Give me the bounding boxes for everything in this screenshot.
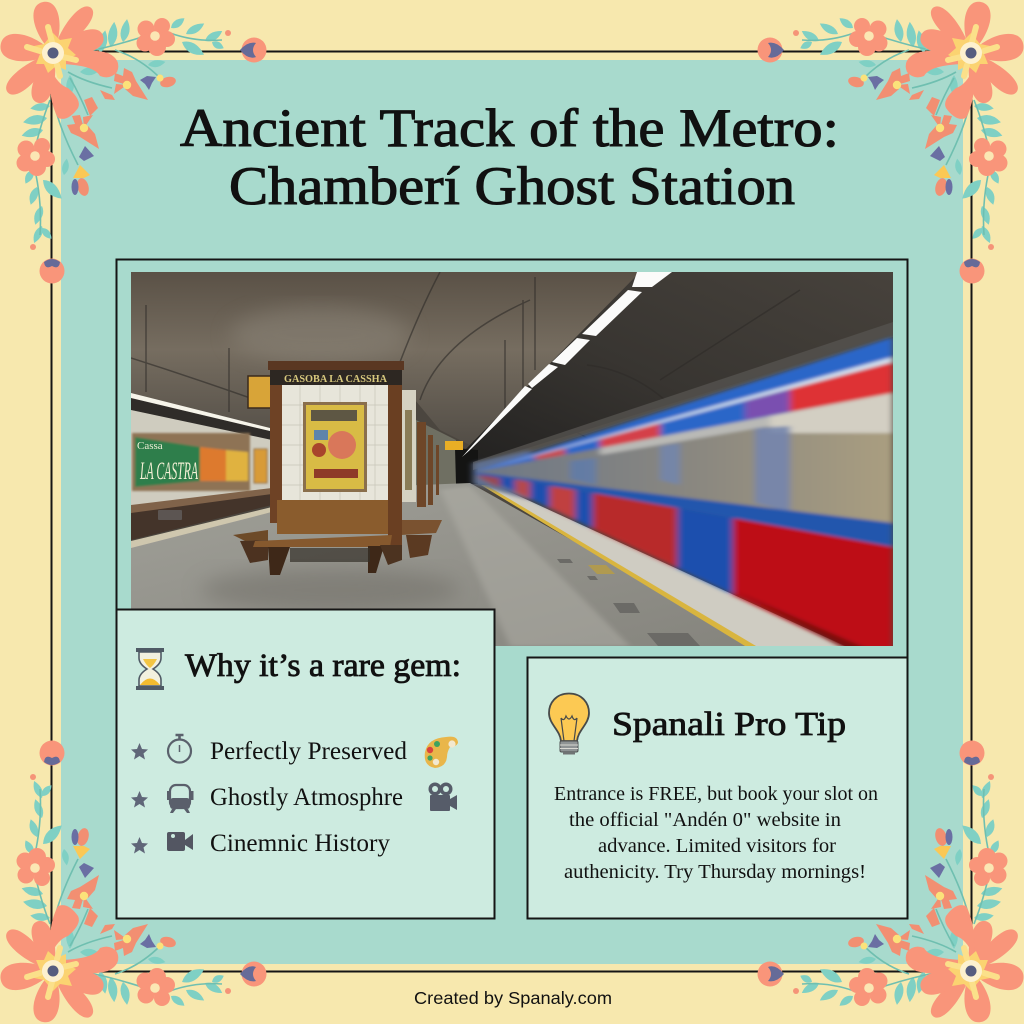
photo: metro platform with passing train: LA CASTRA [140,458,198,485]
mint main panel [61,60,963,964]
floral corner: top right [758,0,1024,283]
track plaque [158,510,182,520]
distant columns [417,422,439,507]
right vaulted ceiling [460,272,893,465]
icon: star bullet 2 [131,791,148,808]
yellow floor patch [588,565,615,574]
tip body text [554,783,878,883]
icon: star bullet 3 [131,837,148,854]
tip body text: authenicity. Try Thursday mornings! [564,861,866,883]
left lamp bar [131,398,270,441]
ceiling light strip [462,272,672,457]
dark tunnel mouth [455,448,478,484]
kiosk sign text: GASOBA LA CASSHA [284,374,388,385]
left wall adverts [132,433,267,491]
lit ceiling patch [230,307,410,363]
icon: hourglass [136,648,164,690]
train body [473,337,893,670]
tip body text: the official "Andén 0" website in [569,809,841,831]
far platform wall [416,420,456,486]
train roof edge [473,322,893,470]
list item 3: Cinemnic History [210,830,390,857]
lower brown wall [131,494,270,540]
floral corner: bottom left [0,740,266,1024]
photo: metro platform with passing train [131,272,893,670]
platform floor [131,483,760,646]
distant yellow sign [445,441,463,450]
title [180,98,839,216]
icon: star bullet 1 [131,743,148,760]
footer credit: Created by Spanaly.com [414,988,612,1008]
icon: train [167,785,194,813]
left vaulted ceiling [131,272,640,445]
title: Ancient Track of the Metro: [180,98,839,158]
icon: light bulb [549,694,589,754]
hanging yellow sign [248,376,272,408]
list item 1: Perfectly Preserved [210,738,407,765]
left bench [233,530,268,563]
left advert lettering: Cassa [137,440,163,452]
kiosk poster [303,402,367,492]
icon: video camera [167,832,193,851]
icon: film camera [428,782,457,811]
tip body text: advance. Limited visitors for [598,835,836,857]
floor tactile tiles [557,559,700,646]
icon: paint palette [425,737,458,768]
floral corner: bottom right [758,740,1024,1024]
floral corner: top left [0,0,266,283]
icon: stopwatch [168,735,191,762]
photo frame [116,260,908,660]
platform edge strip and yellow line [482,485,845,646]
tip body text: Entrance is FREE, but book your slot on [554,783,878,805]
floor reflection [440,486,630,646]
title: Chamberí Ghost Station [229,156,795,216]
heading: Spanali Pro Tip [612,706,846,743]
wooden kiosk [253,361,416,575]
right bench [401,520,442,558]
panel: Spanali Pro Tip [528,658,908,918]
left tiled wall [131,410,272,507]
floor shadow [200,568,460,612]
panel: why it's a rare gem [116,610,494,918]
list item 2: Ghostly Atmosphre [210,784,403,811]
heading: Why it’s a rare gem: [185,648,461,684]
